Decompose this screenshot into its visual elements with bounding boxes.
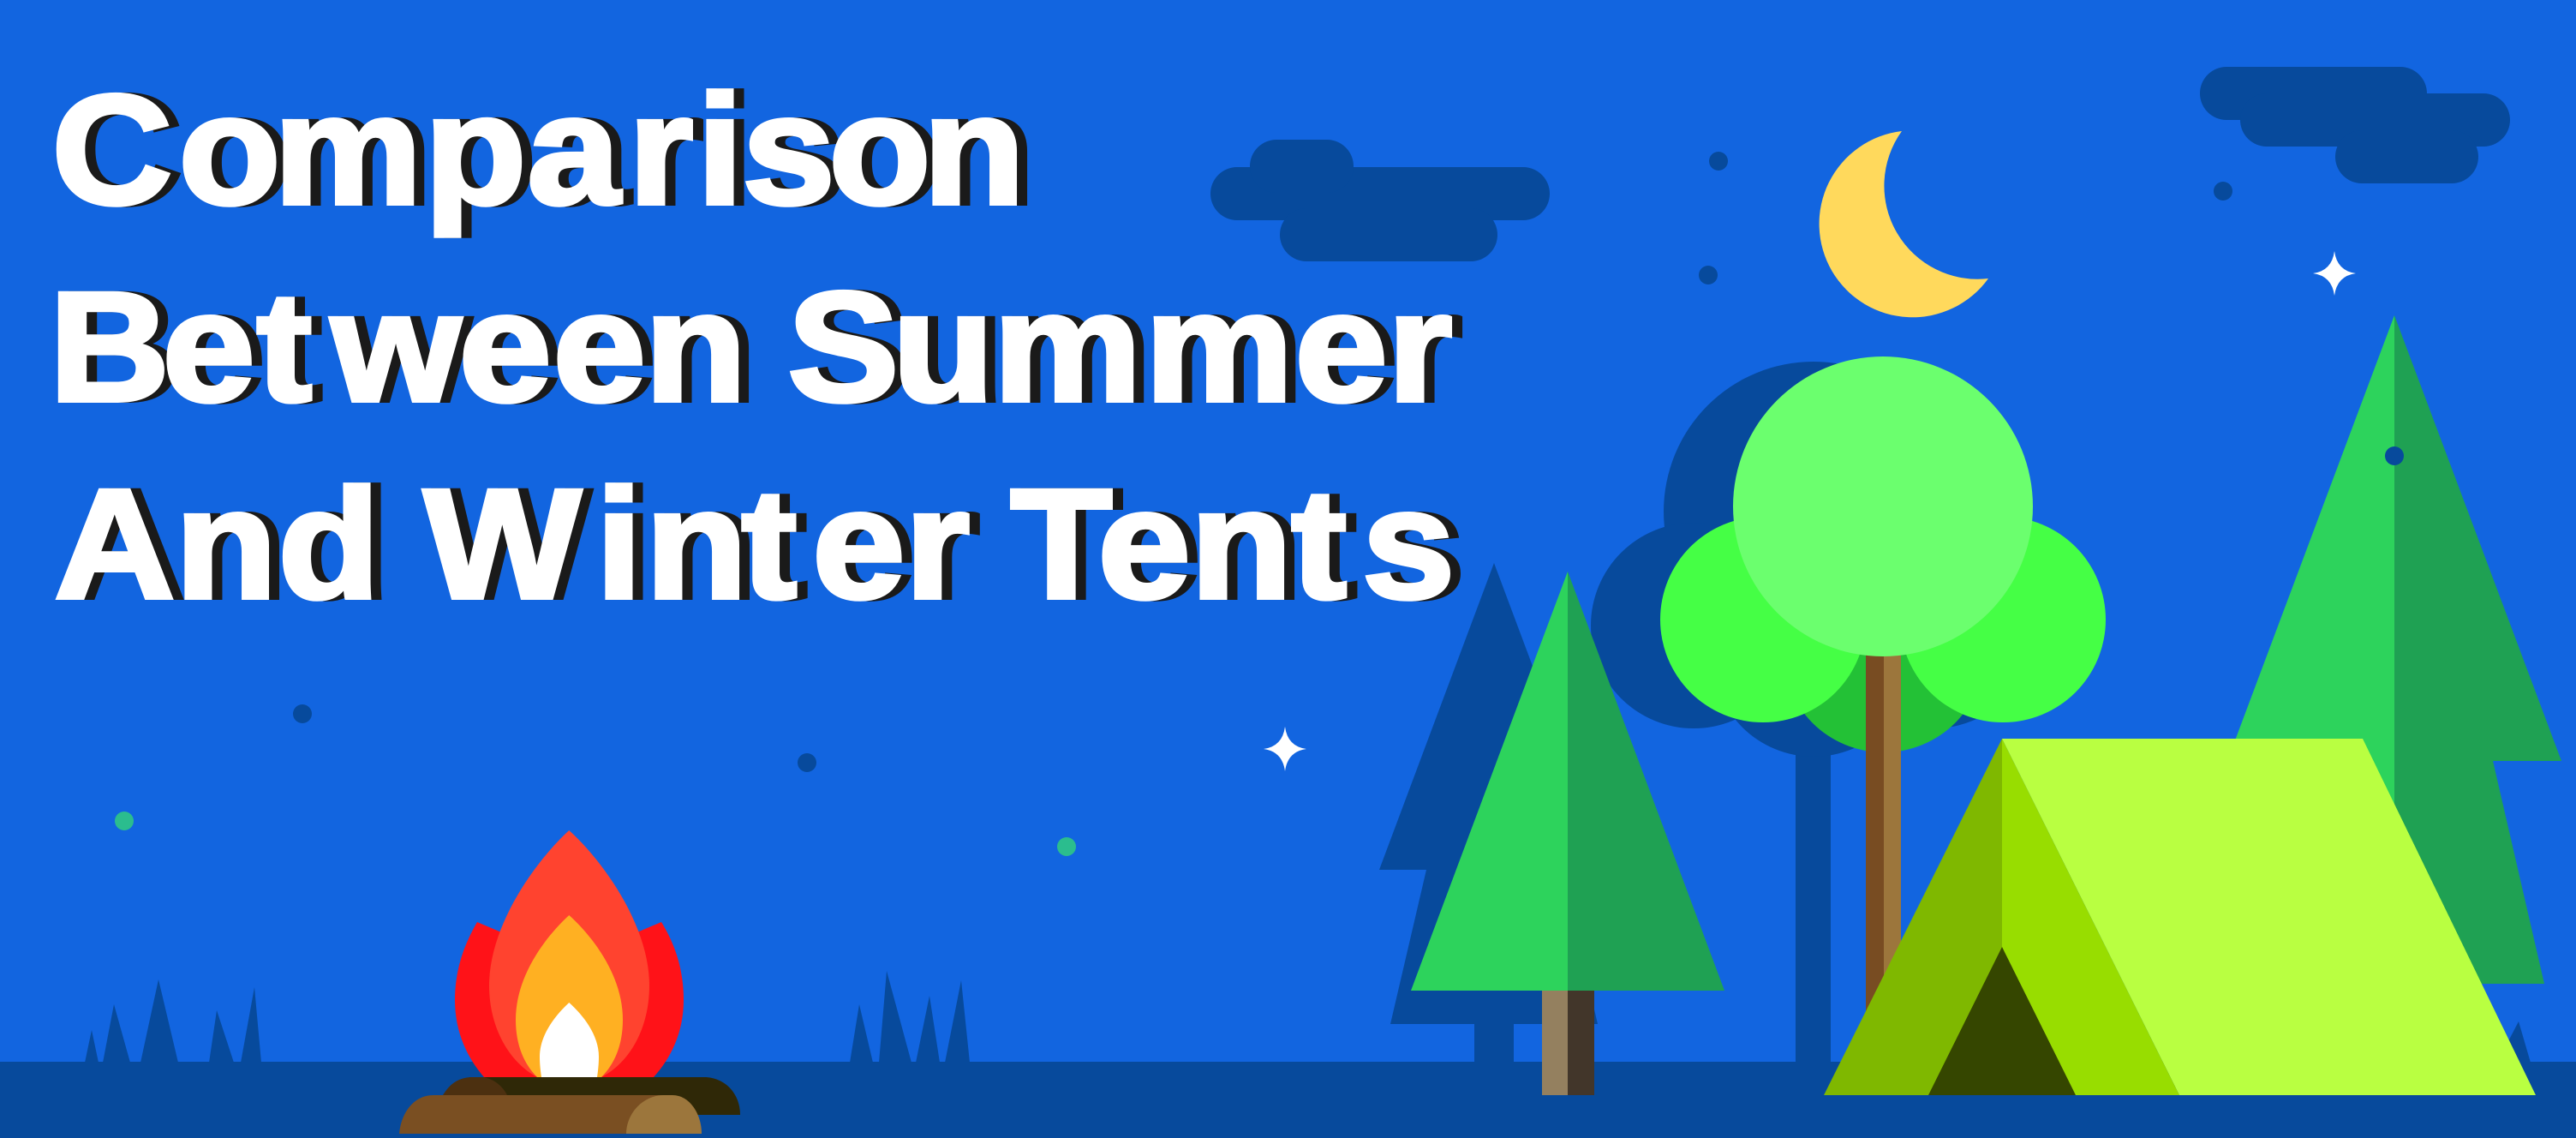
right pine tree bbox=[2227, 315, 2561, 984]
grass middle bbox=[850, 971, 970, 1063]
grass right bbox=[2497, 1021, 2531, 1063]
title bbox=[49, 62, 1465, 631]
title text bbox=[49, 62, 1455, 631]
title shadow: Between Summer bbox=[59, 259, 1462, 434]
icon: star right bbox=[2313, 251, 2356, 296]
cloud: right bbox=[2200, 67, 2510, 183]
flames bbox=[455, 830, 684, 1077]
cloud: left bbox=[1210, 140, 1550, 261]
icon: star left bbox=[1264, 727, 1306, 771]
tent bbox=[1824, 739, 2536, 1095]
title shadow: And Winter Tents bbox=[64, 456, 1465, 631]
title text: And Winter Tents bbox=[54, 456, 1455, 631]
campfire bbox=[399, 830, 740, 1134]
grass left bbox=[85, 979, 261, 1063]
front pine tree bbox=[1411, 572, 1724, 1095]
round tree bbox=[1660, 356, 2106, 1063]
background tree silhouette: pine bbox=[1379, 563, 1609, 1062]
title shadow: Comparison bbox=[62, 62, 1035, 237]
front log bbox=[399, 1095, 702, 1134]
title text: Comparison bbox=[51, 62, 1025, 237]
dot on right pine bbox=[2385, 446, 2404, 465]
icon: crescent moon bbox=[1820, 131, 1988, 317]
background tree silhouette: round bbox=[1591, 362, 2036, 1062]
back log bbox=[442, 1077, 740, 1115]
title text: Between Summer bbox=[49, 259, 1452, 434]
ground bbox=[0, 1062, 2576, 1138]
title shadow bbox=[59, 62, 1465, 631]
night sky dots bbox=[115, 152, 2232, 856]
